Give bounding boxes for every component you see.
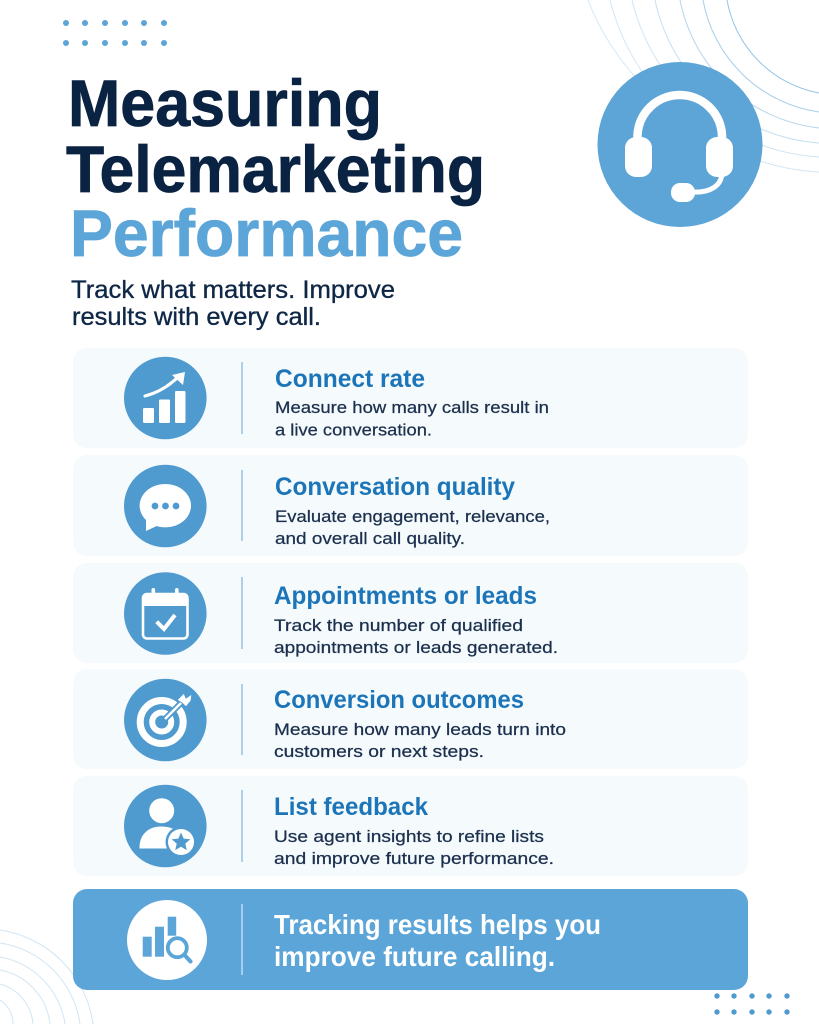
subtitle: Track what matters. Improve [71,276,395,304]
banner text: improve future calling. [274,941,555,972]
panel: connect rate [73,348,748,448]
panel: conversation quality [73,455,748,556]
callout banner [73,889,748,990]
description: Evaluate engagement, relevance, [275,508,550,526]
description: Track the number of qualified [274,617,523,635]
description: a live conversation. [275,422,432,440]
title [66,66,485,270]
icon: chart with magnifier [127,900,207,980]
panel: appointments or leads [73,563,748,663]
icon: target with arrow [124,679,207,761]
heading: Conversation quality [275,473,515,501]
icon: rising bar chart [124,357,207,439]
decorative arcs: top right [588,0,819,172]
heading: Conversion outcomes [274,686,524,714]
decorative arcs: bottom left [0,930,93,1024]
description: appointments or leads generated. [274,639,558,657]
icon: speech bubble [124,465,207,547]
dot grid: bottom right [714,993,790,1015]
title: Telemarketing [66,132,485,206]
panel: conversion outcomes [73,669,748,769]
heading: List feedback [274,793,428,821]
description: and overall call quality. [275,530,465,548]
title: Measuring [68,66,382,140]
description: Measure how many leads turn into [274,721,566,739]
icon: headset [598,62,762,227]
title: Performance [70,196,463,270]
description [275,399,549,440]
banner text: Tracking results helps you [274,909,601,940]
icon: calendar check [124,572,207,655]
description [274,828,554,868]
description: customers or next steps. [274,743,484,761]
dot grid: top left [63,20,167,46]
panel: list feedback [73,776,748,876]
description [274,721,566,761]
description [275,508,550,548]
description: Use agent insights to refine lists [274,828,544,846]
icon: person with star [124,785,207,867]
description: Measure how many calls result in [275,399,549,417]
subtitle: results with every call. [72,303,321,331]
description: and improve future performance. [274,850,554,868]
banner text [274,909,601,972]
subtitle [71,276,395,331]
heading: Appointments or leads [274,582,537,610]
heading: Connect rate [275,365,425,393]
description [274,617,558,657]
